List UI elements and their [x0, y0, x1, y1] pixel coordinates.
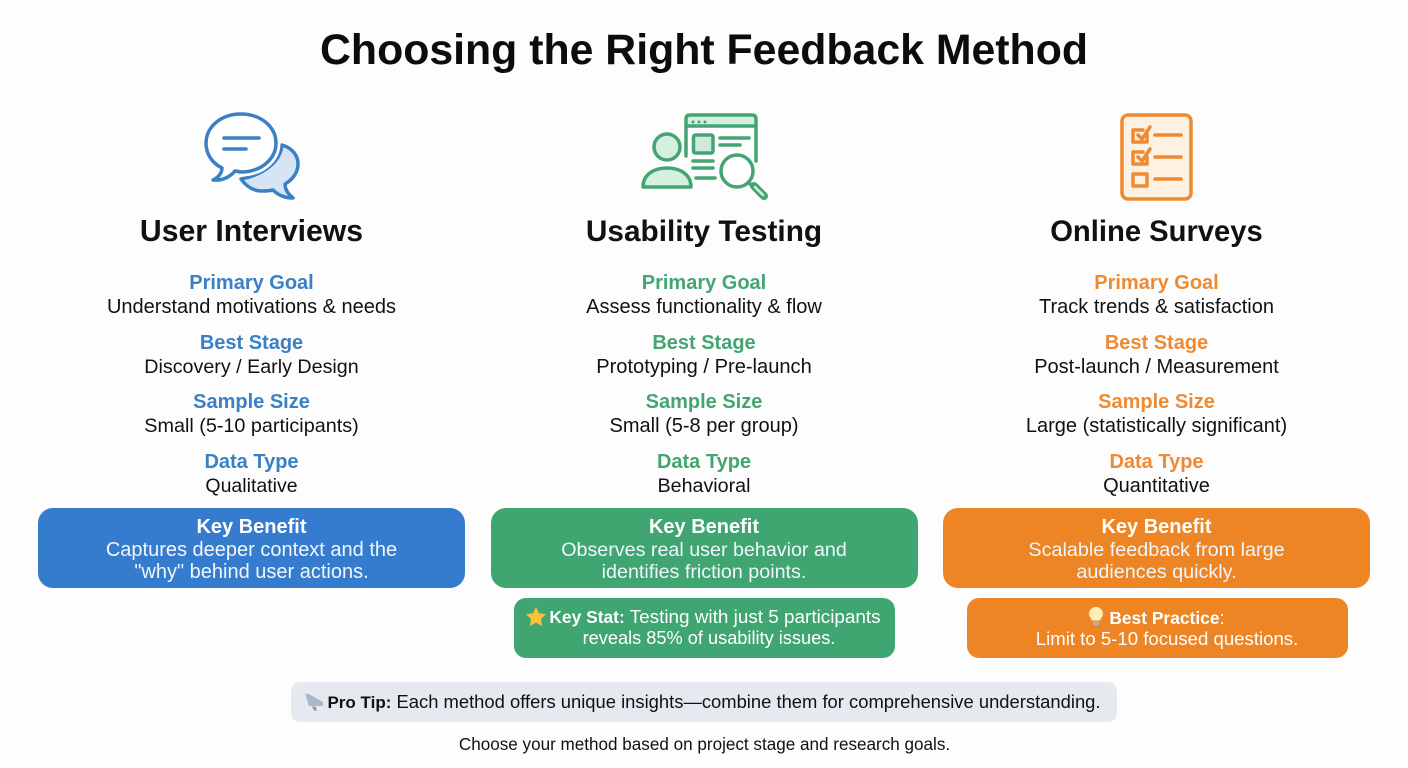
text: sample size value: Small (5-10 participants) — [144, 415, 359, 437]
label: best stage: Best Stage — [200, 332, 303, 354]
callout: pro tip — [291, 682, 1117, 722]
callout: key benefit: Key Benefit — [1101, 516, 1212, 538]
callout: key benefit: Scalable feedback from large — [1028, 539, 1285, 561]
label: data type: Data Type — [657, 451, 751, 473]
callout: key benefit: Key Benefit — [196, 516, 307, 538]
text: data type value: Behavioral — [657, 475, 751, 497]
label: primary goal: Primary Goal — [642, 272, 766, 294]
callout: key benefit: audiences quickly. — [1076, 561, 1237, 583]
text: best stage value: Prototyping / Pre-launch — [596, 356, 812, 378]
label: best stage: Best Stage — [1105, 332, 1208, 354]
callout: key stat — [514, 598, 895, 658]
panel: User Interviews — [38, 215, 465, 588]
icon: star — [526, 607, 546, 626]
callout: key benefit: identifies friction points. — [602, 561, 806, 583]
icon: usability test — [641, 113, 768, 200]
label: sample size: Sample Size — [193, 391, 310, 413]
callout: pro tip: Pro Tip: Each method offers unique insights—combine them for comprehensive understanding. — [327, 691, 1101, 712]
text: best stage value: Discovery / Early Design — [144, 356, 359, 378]
callout: best practice: Best Practice: — [1109, 607, 1225, 628]
callout: key stat: Key Stat: Testing with just 5 participants — [549, 607, 881, 628]
label: data type: Data Type — [1109, 451, 1204, 473]
heading: Usability Testing: Usability Testing — [586, 215, 822, 248]
callout: key benefit: "why" behind user actions. — [134, 561, 369, 583]
panel: Usability Testing — [491, 215, 918, 658]
text: sample size value: Large (statistically significant) — [1026, 415, 1287, 437]
text: primary goal value: Understand motivations & needs — [107, 296, 396, 318]
callout: key benefit: Key Benefit — [649, 516, 759, 538]
heading: User Interviews: User Interviews — [140, 215, 363, 248]
icon: megaphone — [305, 694, 323, 710]
callout: best practice — [966, 598, 1348, 658]
text: data type value: Quantitative — [1103, 475, 1210, 497]
callout: best practice: Limit to 5-10 focused questions. — [1036, 628, 1298, 649]
icon: chat bubbles — [204, 112, 300, 200]
callout: key benefit: Captures deeper context and the — [106, 539, 397, 561]
label: primary goal: Primary Goal — [189, 272, 314, 294]
text: best stage value: Post-launch / Measurement — [1034, 356, 1279, 378]
callout: key benefit: Observes real user behavior and — [561, 539, 847, 561]
callout: key benefit — [38, 508, 465, 588]
callout: key stat: reveals 85% of usability issues. — [583, 628, 835, 648]
icon: light bulb — [1089, 607, 1103, 626]
callout: key benefit — [943, 508, 1370, 588]
callout: key benefit — [490, 508, 918, 588]
label: primary goal: Primary Goal — [1094, 272, 1219, 294]
label: sample size: Sample Size — [1098, 391, 1215, 413]
heading: Online Surveys: Online Surveys — [1050, 216, 1263, 248]
label: sample size: Sample Size — [646, 391, 762, 413]
icon: survey checklist — [1120, 113, 1193, 201]
label: best stage: Best Stage — [652, 332, 756, 354]
panel: Online Surveys — [943, 216, 1370, 658]
text: data type value: Qualitative — [205, 475, 298, 497]
title: Choosing the Right Feedback Method — [320, 26, 1088, 74]
text: primary goal value: Track trends & satisfaction — [1039, 296, 1274, 318]
footer note: Choose your method based on project stage and research goals. — [459, 735, 950, 754]
text: sample size value: Small (5-8 per group) — [610, 415, 798, 437]
label: data type: Data Type — [204, 451, 299, 473]
text: primary goal value: Assess functionality & flow — [586, 296, 822, 318]
